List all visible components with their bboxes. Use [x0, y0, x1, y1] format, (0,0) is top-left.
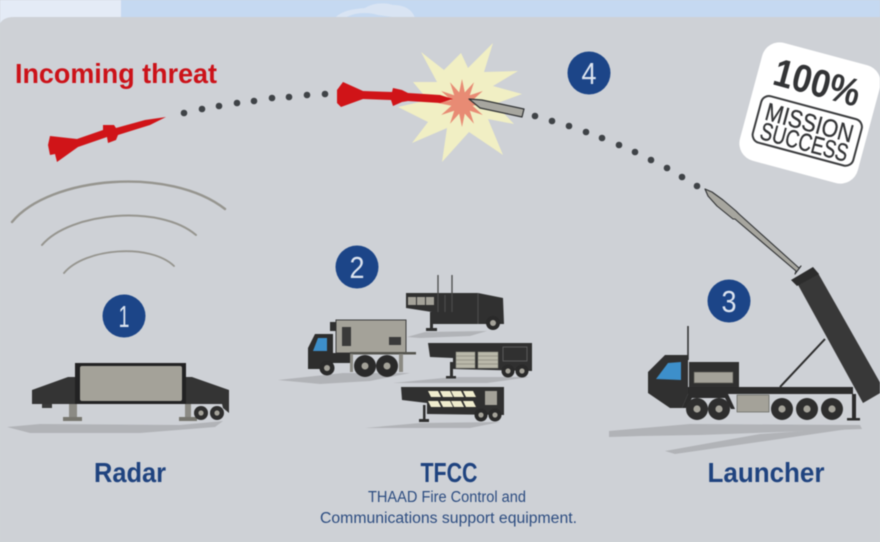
TFCC vehicle: missile-rack trailer: [365, 387, 504, 428]
heading: incoming threat: Incoming threat: [15, 58, 217, 89]
TFCC description: [320, 489, 577, 527]
step number 2: 2: [350, 250, 364, 285]
icon: incoming red missile: [48, 117, 166, 162]
launcher truck: [609, 267, 880, 454]
radar unit: [7, 363, 229, 433]
trajectory dots: threat: [181, 91, 328, 116]
step number 1: 1: [118, 299, 130, 334]
radar waves: [12, 182, 225, 273]
step number 1: [102, 294, 146, 338]
label: Radar: Radar: [94, 457, 166, 488]
TFCC vehicle: louvred trailer: [393, 343, 532, 383]
step number 3: 3: [722, 284, 736, 319]
step number 4: 4: [582, 56, 596, 91]
badge: 100% mission success: [735, 38, 880, 188]
icon: threat missile at impact: [337, 82, 453, 107]
icon: launching interceptor: [705, 189, 801, 274]
badge: 100% mission success: 100%: [769, 51, 865, 115]
icon: interceptor at impact: [469, 99, 524, 117]
TFCC description: THAAD Fire Control and: [368, 489, 526, 506]
TFCC vehicle: main truck: [278, 320, 416, 384]
badge: 100% mission success: MISSION: [762, 98, 856, 148]
step number 4: [568, 52, 610, 94]
TFCC vehicle: antenna trailer: [406, 275, 504, 338]
step number 2: [336, 246, 378, 288]
TFCC description: Communications support equipment.: [320, 510, 577, 527]
label: Launcher: Launcher: [708, 457, 825, 488]
step number 3: [708, 280, 750, 322]
label: TFCC: TFCC: [420, 457, 478, 488]
sky backdrop: [0, 0, 880, 30]
icon: explosion: [398, 43, 522, 162]
trajectory dots: interceptor: [532, 113, 700, 189]
badge: 100% mission success: SUCCESS: [757, 117, 851, 168]
